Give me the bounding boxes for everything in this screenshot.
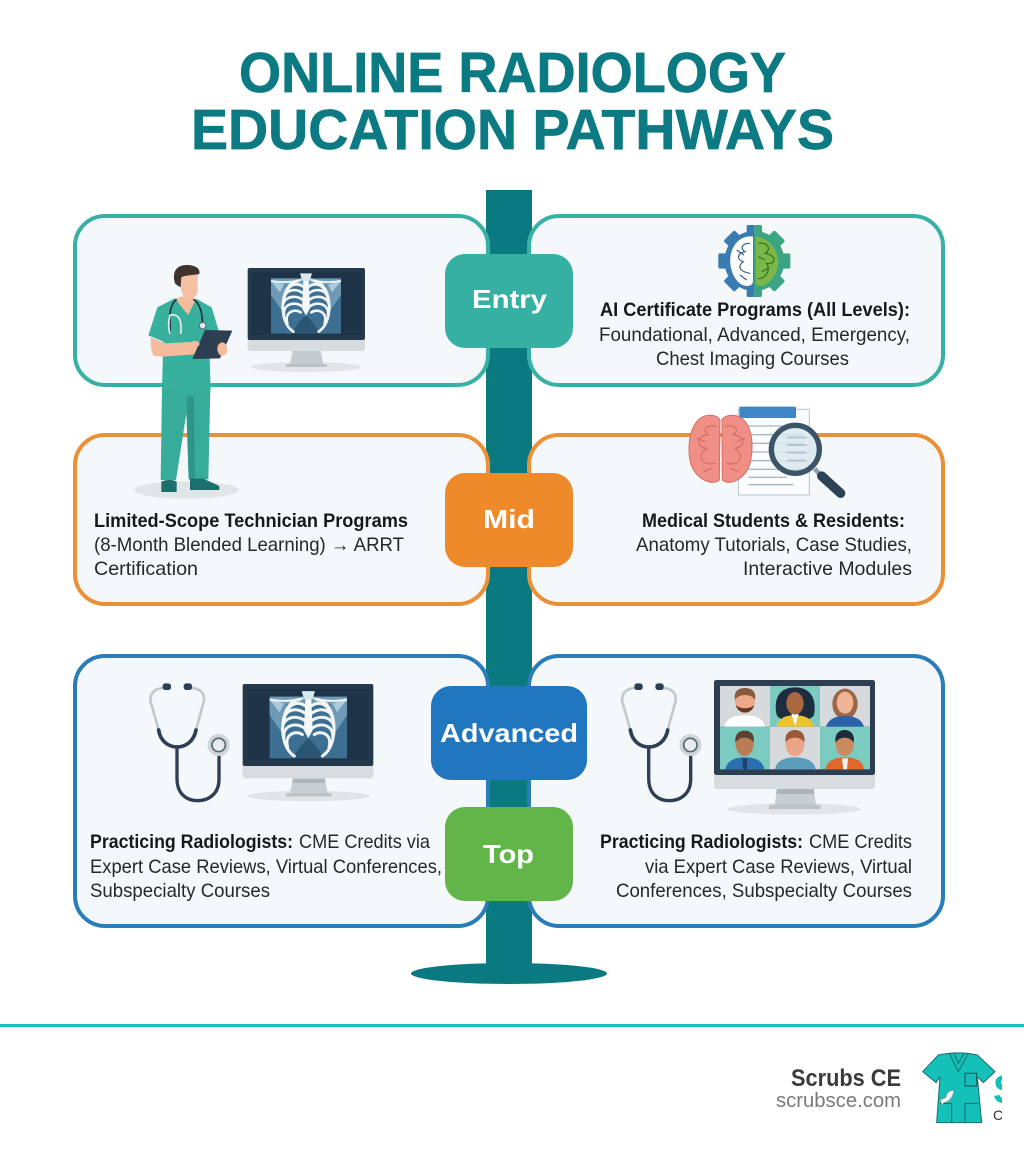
- text: medical students and residents: Interactive Modules: [743, 558, 912, 580]
- panel: entry right: [529, 216, 943, 385]
- text: medical students and residents: Anatomy Tutorials, Case Studies,: [636, 534, 912, 556]
- icon: video conference monitor: [714, 680, 875, 815]
- text: practicing radiologists right: via Expert Case Reviews, Virtual: [645, 856, 912, 878]
- cropped logo wordmark: [994, 1076, 1002, 1120]
- panel: mid right: [529, 435, 943, 604]
- central spine with base: [411, 190, 607, 984]
- text: practicing radiologists right: Conferences, Subspecialty Courses: [616, 880, 912, 902]
- text: medical students and residents: [636, 510, 912, 580]
- badge: Advanced: Advanced: [440, 718, 578, 748]
- text: limited-scope technician programs: [94, 510, 408, 580]
- text: AI certificate programs: [599, 299, 910, 370]
- footer brand text: scrubsce.com: [776, 1090, 901, 1112]
- text: AI certificate programs: Foundational, Advanced, Emergency,: [599, 324, 910, 346]
- text: limited-scope technician programs: (8-Month Blended Learning) → ARRT: [94, 534, 404, 556]
- panel: advanced right: [529, 656, 943, 926]
- title: EDUCATION PATHWAYS: [191, 98, 834, 162]
- text: practicing radiologists right: CME Credits: [809, 831, 912, 853]
- title: ONLINE RADIOLOGY: [239, 41, 786, 105]
- badge: Entry: [445, 254, 573, 348]
- text: AI certificate programs: Chest Imaging Courses: [656, 348, 849, 370]
- text: practicing radiologists left: Subspecialty Courses: [90, 880, 270, 902]
- icon: scrubs logo: [923, 1053, 995, 1123]
- text: medical students and residents: Medical Students & Residents:: [642, 510, 905, 532]
- panel: entry left: [75, 216, 488, 385]
- footer rule: [0, 1024, 1024, 1027]
- title: [191, 41, 834, 162]
- text: practicing radiologists right: [600, 831, 912, 902]
- text: AI certificate programs: AI Certificate Programs (All Levels):: [600, 299, 910, 321]
- badge: Advanced: [431, 686, 587, 780]
- badge: Mid: Mid: [483, 504, 535, 534]
- text: limited-scope technician programs: Certification: [94, 558, 198, 580]
- panel: advanced left: [75, 656, 488, 926]
- icon: brain and document with magnifier: [689, 407, 841, 495]
- text: practicing radiologists right: Practicing Radiologists:: [600, 831, 803, 853]
- panel: mid left: [75, 435, 488, 604]
- badge: Top: Top: [483, 839, 534, 869]
- text: practicing radiologists left: CME Credits via: [299, 831, 430, 853]
- icon: monitor with chest x-ray: [243, 684, 373, 801]
- footer brand text: Scrubs CE: [791, 1065, 901, 1092]
- icon: doctor with tablet: [134, 265, 365, 499]
- icon: stethoscope left: [150, 683, 230, 801]
- icon: AI brain gear: [718, 225, 790, 297]
- cropped logo wordmark: C: [993, 1107, 1003, 1123]
- text: limited-scope technician programs: Limited-Scope Technician Programs: [94, 510, 408, 532]
- icon: stethoscope right: [622, 683, 701, 801]
- badge: Entry: Entry: [472, 284, 548, 314]
- cropped logo wordmark: S: [993, 1068, 1020, 1112]
- text: practicing radiologists left: Expert Case Reviews, Virtual Conferences,: [90, 856, 442, 878]
- badge: Top: [445, 807, 573, 901]
- badge: Mid: [445, 473, 573, 567]
- footer brand text: [776, 1065, 901, 1112]
- text: practicing radiologists left: Practicing Radiologists:: [90, 831, 293, 853]
- text: practicing radiologists left: [90, 831, 442, 902]
